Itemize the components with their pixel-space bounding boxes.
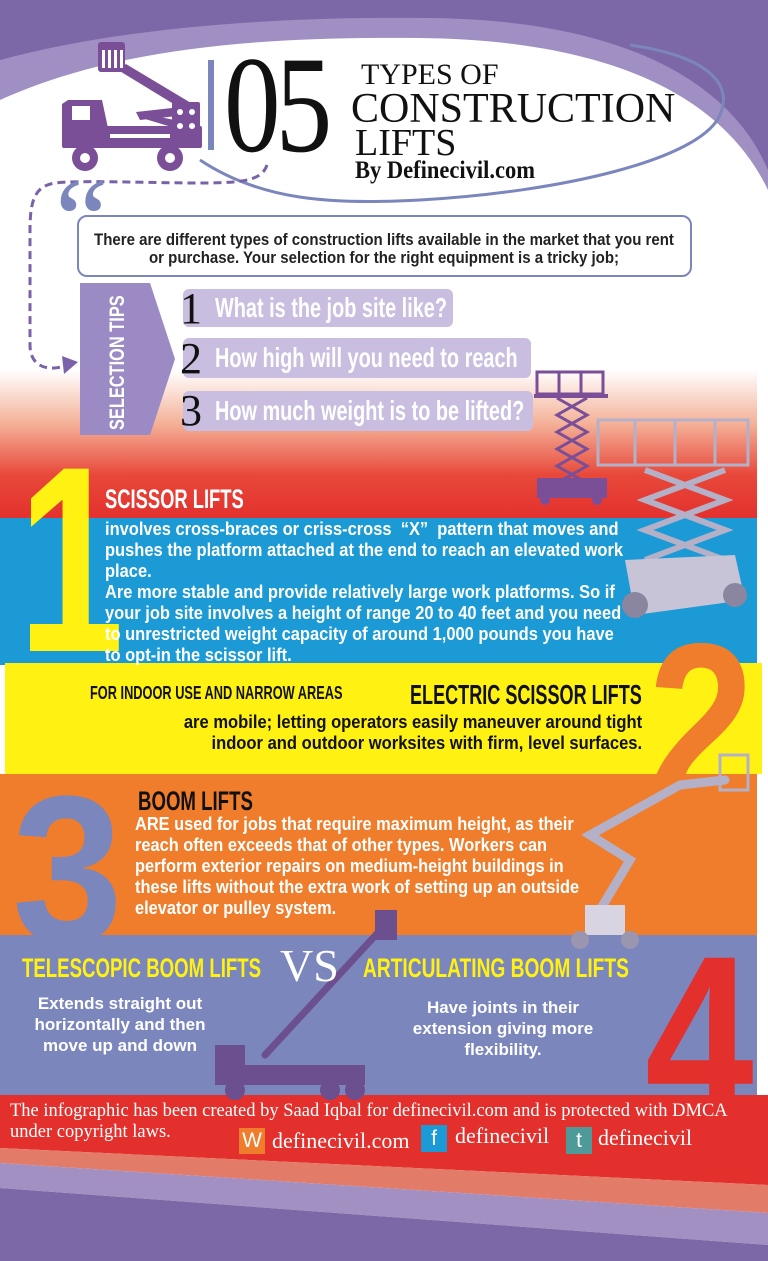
section: boom lifts: BOOM LIFTS — [138, 786, 253, 816]
selection tips tab: SELECTION TIPS — [106, 295, 129, 430]
section: electric scissor lifts — [90, 679, 642, 753]
section: electric scissor lifts: are mobile; letting operators easily maneuver around tight — [184, 712, 642, 732]
selection tips tab — [80, 283, 175, 435]
tips list: 2 — [180, 334, 202, 383]
title: CONSTRUCTION — [351, 86, 675, 132]
tips list: What is the job site like? — [215, 292, 447, 323]
intro box — [77, 215, 692, 277]
section: scissor lifts: SCISSOR LIFTS — [105, 484, 244, 514]
section: scissor lifts: Are more stable and provide relatively large work platforms. So if — [105, 582, 615, 602]
number 2: 2 — [648, 596, 754, 848]
section: electric scissor lifts: ELECTRIC SCISSOR LIFTS — [410, 679, 642, 710]
section: telescopic vs articulating: Extends straight out — [38, 994, 202, 1013]
tips list — [180, 284, 533, 435]
footer credits: W — [242, 1129, 262, 1152]
title: 05 — [224, 28, 327, 181]
section: telescopic vs articulating: TELESCOPIC BOOM LIFTS — [22, 953, 261, 983]
icon: scissor lift small — [534, 370, 608, 505]
section: telescopic vs articulating: horizontally and then — [35, 1015, 205, 1034]
section: scissor lifts: to unrestricted weight capacity of around 1,000 pounds you have — [105, 624, 614, 644]
section: boom lifts: perform exterior repairs on medium-height buildings in — [135, 856, 564, 876]
title: TYPES OF — [361, 58, 499, 91]
icon: scissor lift photo — [596, 418, 750, 618]
icon: truck lift — [62, 42, 202, 171]
footer credits — [10, 1101, 728, 1154]
section: scissor lifts: your job site involves a height of range 20 to 40 feet and you need — [105, 603, 621, 623]
dashed arrow — [28, 164, 268, 374]
section: telescopic vs articulating: Have joints in their — [427, 998, 579, 1017]
section: telescopic vs articulating: extension giving more — [413, 1019, 593, 1038]
intro box: or purchase. Your selection for the right equipment is a tricky job; — [149, 249, 619, 267]
icon: telescopic truck — [215, 910, 397, 1100]
footer credits: under copyright laws. — [10, 1122, 171, 1142]
section: scissor lifts: involves cross-braces or criss-cross “X” pattern that moves and — [105, 519, 619, 539]
tips list: 3 — [180, 386, 202, 435]
title: By Definecivil.com — [355, 157, 535, 184]
footer credits: The infographic has been created by Saad Iqbal for definecivil.com and is protected with DMCA — [10, 1101, 728, 1121]
intro box: There are different types of construction lifts available in the market that you rent — [94, 231, 674, 249]
tips list: How much weight is to be lifted? — [215, 395, 524, 426]
tips list: How high will you need to reach — [215, 342, 518, 373]
footer credits: t — [576, 1129, 582, 1152]
footer credits: f — [431, 1127, 437, 1150]
section: scissor lifts: to opt-in the scissor lift. — [105, 645, 292, 665]
section: electric scissor lifts: indoor and outdoor worksites with firm, level surfaces. — [211, 733, 642, 753]
section: boom lifts: elevator or pulley system. — [135, 898, 336, 918]
section: scissor lifts: pushes the platform attached at the end to reach an elevated work — [105, 540, 623, 560]
section: telescopic vs articulating: VS — [280, 940, 339, 991]
tips list: 1 — [180, 284, 202, 333]
section: scissor lifts — [105, 484, 623, 665]
title ellipse — [199, 44, 725, 203]
quote marks: “ — [55, 153, 108, 286]
title: LIFTS — [355, 122, 456, 164]
number 1: 1 — [18, 412, 124, 708]
section: telescopic vs articulating: flexibility. — [464, 1040, 542, 1059]
section: telescopic vs articulating — [22, 940, 629, 1059]
section: telescopic vs articulating: move up and down — [43, 1036, 197, 1055]
title — [208, 28, 675, 184]
footer credits: definecivil — [598, 1125, 692, 1150]
number 3: 3 — [12, 752, 123, 987]
section: boom lifts — [135, 786, 579, 918]
number 4: 4 — [645, 908, 754, 1165]
icon: articulating boom lift — [571, 754, 750, 949]
section: telescopic vs articulating: ARTICULATING BOOM LIFTS — [363, 953, 629, 983]
footer credits: definecivil — [455, 1123, 549, 1148]
section: boom lifts: ARE used for jobs that require maximum height, as their — [135, 814, 574, 834]
footer credits: definecivil.com — [272, 1128, 409, 1153]
section: scissor lifts: place. — [105, 561, 152, 581]
section: boom lifts: reach often exceeds that of other types. Workers can — [135, 835, 547, 855]
section: boom lifts: these lifts without the extra work of setting up an outside — [135, 877, 579, 897]
section: electric scissor lifts: FOR INDOOR USE AND NARROW AREAS — [90, 683, 343, 703]
